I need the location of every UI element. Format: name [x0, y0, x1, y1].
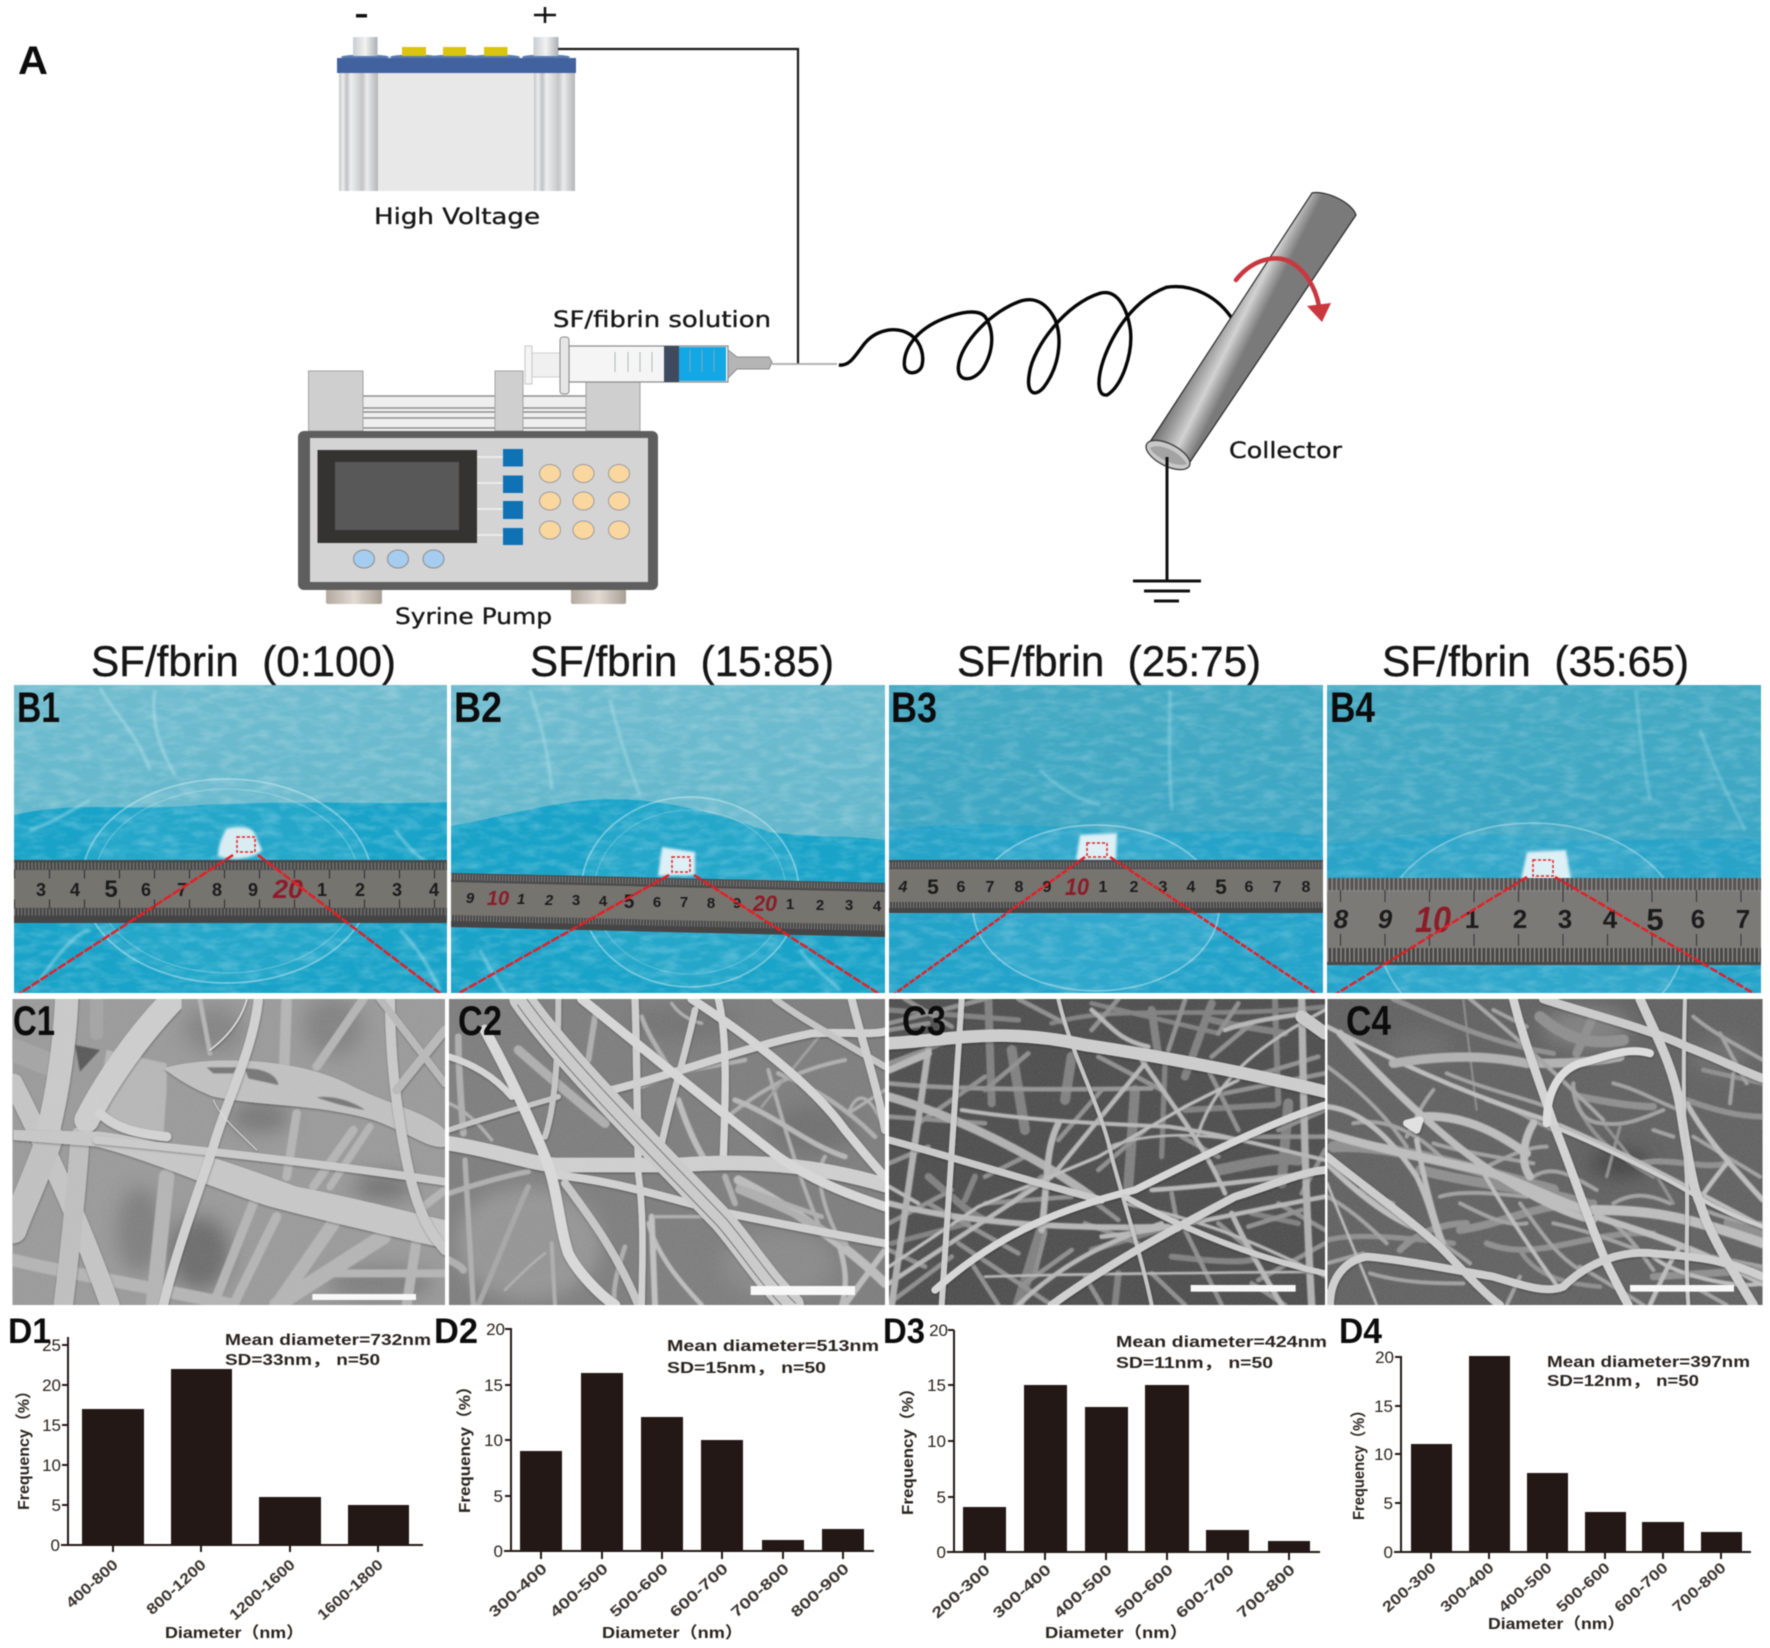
D2 y axis title: Frequency（%） [456, 1378, 474, 1513]
panel B4: photo: 2 [1513, 904, 1527, 934]
D3 x axis title: Diameter（nm） [1045, 1624, 1188, 1642]
chart D2: diameter histogram [456, 1320, 879, 1642]
minus sign [356, 14, 367, 18]
collector cylinder [1142, 193, 1356, 476]
panel B4: photo: 5 [1646, 902, 1664, 937]
panel A: electrospinning schematic [298, 7, 1356, 630]
panel B3: photo: 5 [1215, 876, 1227, 899]
D3 x tick labels [929, 1561, 1299, 1622]
panel B3: photo: 4 [898, 879, 908, 896]
D1 statistics: SD=33nm， n=50 [225, 1352, 380, 1369]
D4 x tick labels: 400-500 [1495, 1559, 1556, 1616]
D3 x tick labels: 500-600 [1112, 1561, 1177, 1622]
panel B4: photo: 7 [1736, 904, 1750, 934]
panel B3: photo: 9 [1043, 879, 1052, 896]
D3 statistics: SD=11nm， n=50 [1116, 1355, 1273, 1372]
label B2: B2 [454, 684, 502, 732]
panel B4: photo: 3 [1558, 904, 1572, 934]
label D3: D3 [883, 1312, 925, 1351]
D1 x tick labels: 800-1200 [143, 1556, 210, 1618]
chart D3: diameter histogram [899, 1321, 1327, 1642]
D2 x tick labels: 800-900 [788, 1560, 853, 1621]
D3 x tick labels: 300-400 [990, 1561, 1055, 1622]
panel B1: photo: 2 [355, 880, 365, 900]
panel B4: photo: 8 [1334, 904, 1349, 934]
panel B3: photo: 4 [1187, 879, 1196, 896]
D2 statistics: SD=15nm， n=50 [667, 1360, 826, 1377]
panel B1: photo: 4 [429, 880, 439, 900]
panel B2: photo: 8 [707, 895, 715, 912]
D1 x tick labels [63, 1556, 387, 1624]
panel B1: photo: 7 [177, 880, 187, 900]
D1 x axis title: Diameter（nm） [165, 1624, 304, 1642]
D3 y tick labels: 20 [929, 1321, 948, 1340]
panel B1: photo: 5 [104, 876, 118, 903]
panel B3: photo: 5 [927, 876, 939, 899]
D4 x tick labels: 700-800 [1669, 1559, 1730, 1616]
D1 x tick labels: 1600-1800 [314, 1556, 387, 1624]
collector label: Collector [1229, 439, 1343, 464]
panel B3: photo: 2 [1130, 879, 1139, 896]
D3 y axis title: Frequency（%） [899, 1380, 917, 1515]
D1 x tick labels: 1200-1600 [226, 1556, 299, 1624]
label D1: D1 [8, 1312, 51, 1351]
D4 bars [1411, 1356, 1742, 1552]
D2 statistics: Mean diameter=513nm [667, 1338, 879, 1355]
D1 y tick labels: 10 [42, 1456, 61, 1475]
D2 x tick labels: 600-700 [667, 1560, 732, 1621]
D4 x tick labels [1379, 1559, 1730, 1616]
D3 y tick labels [927, 1321, 948, 1562]
syringe pump label: Syrine Pump [395, 605, 552, 630]
heading: SF/fibrin 25:75: SF/fbrin (25:75) [957, 638, 1261, 686]
D3 x tick labels: 200-300 [929, 1561, 994, 1622]
D3 x tick labels: 600-700 [1173, 1561, 1238, 1622]
panel B3: photo [889, 685, 1323, 997]
panel B2: photo [451, 685, 885, 997]
D1 y tick labels: 5 [52, 1496, 61, 1515]
D2 statistics [667, 1338, 879, 1377]
D1 y tick labels: 25 [42, 1336, 61, 1355]
D2 x tick labels: 500-600 [607, 1560, 672, 1621]
syringe [525, 337, 837, 394]
label C1: C1 [13, 997, 55, 1044]
heading: SF/fibrin 0:100: SF/fbrin (0:100) [91, 638, 396, 686]
plus sign [534, 7, 556, 23]
D3 statistics: Mean diameter=424nm [1116, 1334, 1327, 1351]
D3 x tick labels: 400-500 [1051, 1561, 1116, 1622]
label D4: D4 [1339, 1312, 1383, 1351]
label B4: B4 [1330, 684, 1375, 732]
panel B3: photo: 8 [1015, 879, 1024, 896]
D3 y tick labels: 10 [927, 1432, 946, 1451]
D3 y tick labels: 0 [937, 1543, 946, 1562]
D1 statistics [225, 1332, 431, 1369]
scale bar C3 [1191, 1285, 1296, 1292]
scale bar C1 [312, 1294, 416, 1300]
D1 y axis title: Frequency（%） [15, 1383, 33, 1510]
panel B2: photo: 1 [517, 891, 525, 908]
panel B4: photo: 9 [1378, 904, 1393, 934]
panel B1: photo: 4 [70, 880, 80, 900]
heading: SF/fibrin 35:65: SF/fbrin (35:65) [1382, 638, 1689, 686]
panel B3: photo: 1 [1099, 879, 1108, 896]
label C3: C3 [902, 997, 946, 1044]
panel B2: photo: 10 [487, 888, 509, 910]
D1 y tick labels: 0 [51, 1536, 60, 1555]
D1 statistics: Mean diameter=732nm [225, 1332, 431, 1349]
D4 y tick labels [1374, 1348, 1394, 1562]
D4 y tick labels: 5 [1384, 1494, 1393, 1513]
panel B4: photo: 6 [1691, 904, 1705, 934]
D4 x tick labels: 500-600 [1553, 1559, 1614, 1616]
panel B3: photo: 3 [1159, 879, 1168, 896]
panel B2: photo: 4 [873, 898, 882, 915]
D4 x tick labels: 300-400 [1437, 1559, 1498, 1616]
panel B1: photo: 9 [248, 880, 258, 900]
rotation arrow [1236, 258, 1331, 322]
D4 y axis title: Frequency（%） [1350, 1403, 1368, 1520]
panel B3: photo: 10 [1065, 874, 1090, 901]
panel B2: photo: 1 [786, 896, 794, 913]
D2 y tick labels: 10 [484, 1431, 503, 1450]
D4 x tick labels: 600-700 [1611, 1559, 1672, 1616]
panel C1: SEM micrograph [12, 997, 445, 1305]
scale bar C2 [751, 1286, 855, 1295]
D3 y tick labels: 5 [937, 1488, 946, 1507]
D4 statistics: SD=12nm， n=50 [1547, 1373, 1699, 1390]
panel B3: photo: 7 [1273, 879, 1282, 896]
D2 y tick labels [484, 1320, 505, 1561]
D2 x tick labels: 700-800 [728, 1560, 793, 1621]
syringe pump [298, 371, 658, 604]
panel B4: photo: 4 [1603, 904, 1618, 934]
label C2: C2 [458, 997, 502, 1044]
icon: high voltage battery [337, 37, 576, 191]
D4 x axis title: Diameter（nm） [1488, 1615, 1625, 1633]
panel B1: photo: 1 [317, 880, 327, 900]
label B1: B1 [17, 684, 60, 732]
heading: SF/fibrin 15:85: SF/fbrin (15:85) [530, 638, 834, 686]
chart D4: diameter histogram [1350, 1348, 1751, 1633]
panel B1: photo: 20 [272, 874, 304, 904]
D2 x tick labels: 300-400 [486, 1560, 551, 1621]
D2 x axis title: Diameter（nm） [602, 1624, 743, 1642]
D1 y tick labels [42, 1336, 61, 1555]
electrospinning jet spiral [839, 287, 1233, 395]
D4 x tick labels: 200-300 [1379, 1559, 1440, 1616]
D2 x tick labels: 400-500 [547, 1560, 612, 1621]
D2 bars [520, 1373, 864, 1551]
D3 axes [947, 1330, 1320, 1560]
panel B2: photo: 7 [680, 894, 688, 911]
D4 y tick labels: 15 [1374, 1397, 1393, 1416]
D3 bars [963, 1385, 1310, 1552]
scale bar C4 [1630, 1285, 1734, 1292]
D4 y tick labels: 20 [1375, 1348, 1394, 1367]
D4 statistics [1547, 1354, 1750, 1390]
panel B2: photo: 9 [466, 890, 475, 907]
panel B4: photo: 1 [1465, 904, 1479, 934]
D2 axes [504, 1328, 874, 1559]
panel B3: photo: 8 [1302, 879, 1311, 896]
D4 y tick labels: 10 [1374, 1445, 1393, 1464]
panel B3: photo: 6 [957, 879, 966, 896]
panel B2: photo: 3 [572, 892, 580, 909]
panel B2: photo: 2 [544, 892, 554, 909]
D2 y tick labels: 5 [494, 1487, 503, 1506]
D2 y tick labels: 20 [486, 1320, 505, 1339]
panel B2: photo: 4 [599, 893, 608, 910]
panel B2: photo: 6 [653, 894, 661, 911]
panel B1: photo: 6 [141, 880, 151, 900]
panel B2: photo: 20 [752, 891, 778, 916]
panel B2: photo: 5 [624, 892, 635, 913]
D4 axes [1394, 1356, 1751, 1559]
panel B1: photo: 3 [392, 880, 402, 900]
D1 bars [82, 1369, 409, 1545]
label D2: D2 [434, 1312, 478, 1351]
D1 axes [61, 1337, 423, 1552]
chart D1: diameter histogram [15, 1332, 431, 1642]
panel C3: SEM micrograph [889, 999, 1325, 1305]
panel B3: photo: 6 [1245, 879, 1254, 896]
panel B2: photo: 2 [816, 897, 824, 914]
panel B1: photo: 8 [212, 880, 222, 900]
panel B1: photo: 3 [36, 880, 46, 900]
D3 x tick labels: 700-800 [1234, 1561, 1299, 1622]
D1 x tick labels: 400-800 [63, 1556, 122, 1612]
D2 x tick labels [486, 1560, 853, 1621]
high voltage label: High Voltage [374, 205, 540, 230]
solution label: SF/fibrin solution [553, 308, 771, 333]
D4 statistics: Mean diameter=397nm [1547, 1354, 1750, 1371]
panel B3: photo: 7 [986, 879, 995, 896]
wire from battery to needle [558, 49, 798, 364]
D3 statistics [1116, 1334, 1327, 1372]
D4 y tick labels: 0 [1384, 1543, 1393, 1562]
label C4: C4 [1346, 997, 1392, 1044]
panel B2: photo: 3 [845, 897, 853, 914]
panel C4: SEM micrograph [1327, 999, 1763, 1305]
panel B4: photo [1326, 684, 1762, 994]
panel B1: photo [14, 685, 447, 997]
panel B4: photo: 10 [1415, 899, 1451, 940]
D2 y tick labels: 0 [494, 1542, 503, 1561]
panel C2: SEM micrograph [449, 997, 885, 1311]
panel B2: photo: 9 [733, 895, 741, 912]
D3 y tick labels: 15 [927, 1376, 946, 1395]
D2 y tick labels: 15 [484, 1376, 503, 1395]
label B3: B3 [891, 684, 937, 732]
ground symbol [1133, 457, 1201, 601]
D1 y tick labels: 15 [42, 1416, 61, 1435]
panel A label: A [18, 39, 48, 83]
D1 y tick labels: 20 [42, 1376, 61, 1395]
